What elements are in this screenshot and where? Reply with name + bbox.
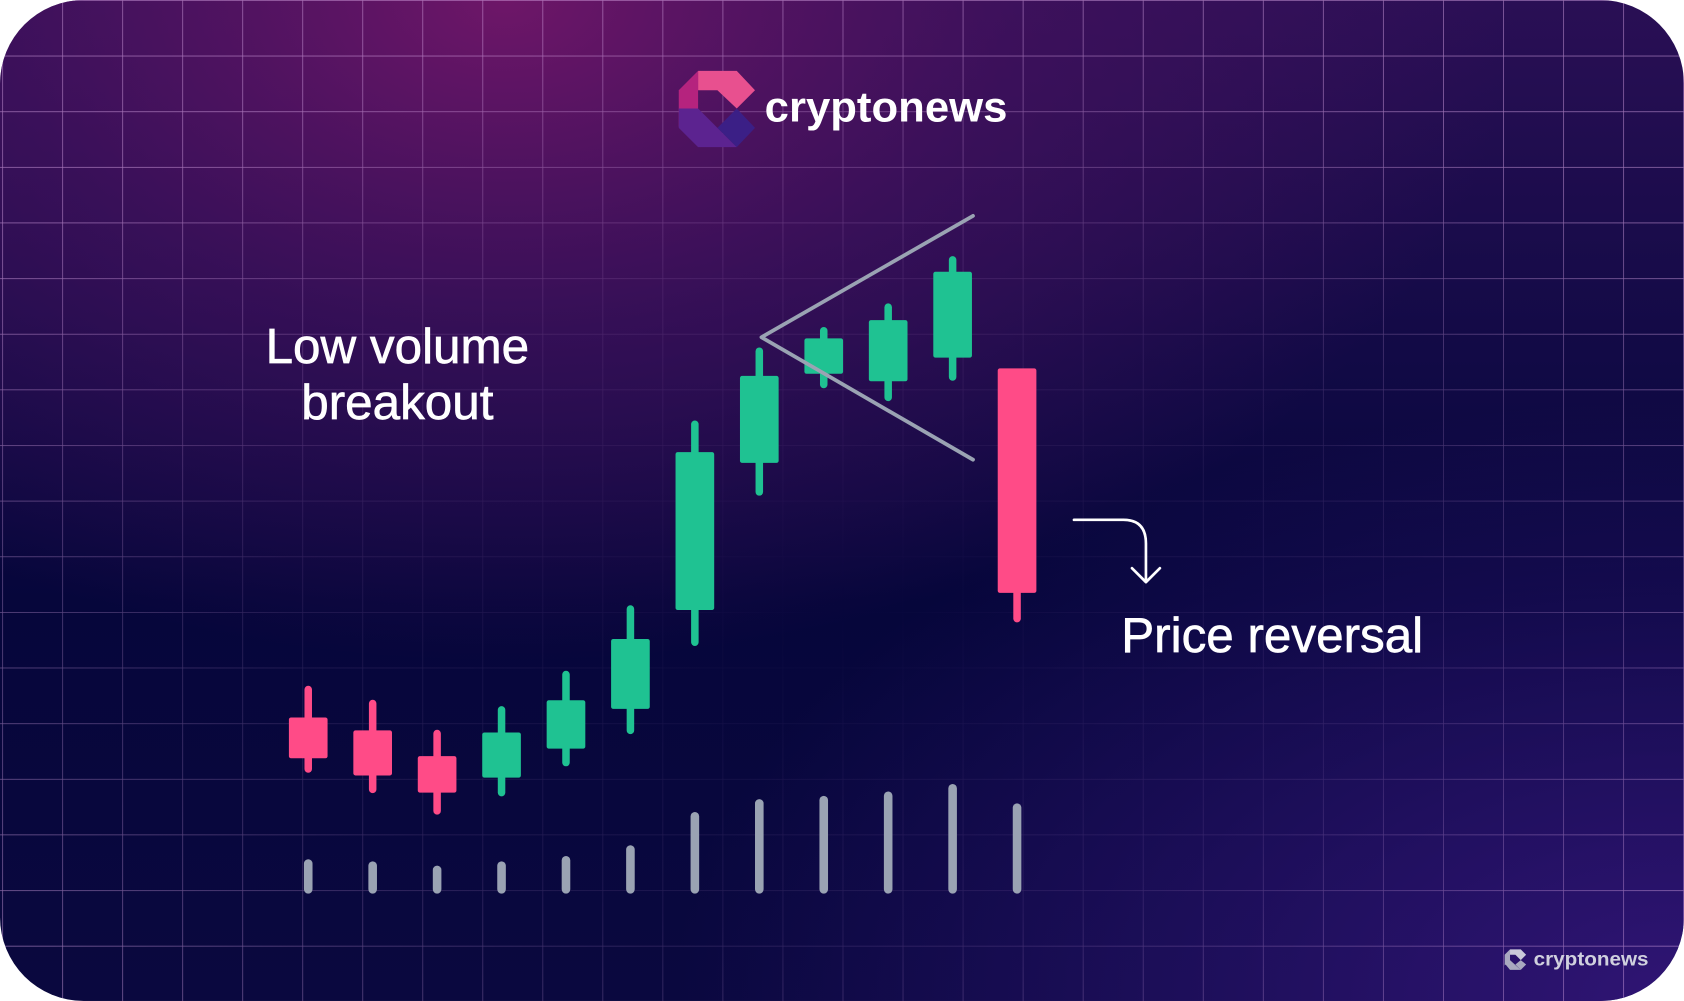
icon: cryptonews logo mark <box>679 71 755 147</box>
candle 1 <box>289 690 328 769</box>
watermark <box>1505 949 1649 971</box>
candle 10 <box>869 307 908 397</box>
candle 4 <box>482 710 521 793</box>
arrow: down-turn <box>1074 520 1160 582</box>
candle 2 <box>353 703 392 789</box>
candle 5 <box>547 674 585 763</box>
logo text: cryptonews <box>765 83 1007 131</box>
volume bars <box>308 788 1017 889</box>
pennant triangle <box>761 216 973 460</box>
candle 6 <box>611 609 650 730</box>
logo <box>679 71 1007 147</box>
candle 9 <box>804 331 843 385</box>
label: price reversal: Price reversal <box>1121 608 1423 663</box>
candle 8 <box>740 351 779 492</box>
watermark text: cryptonews <box>1534 950 1649 971</box>
label: low volume breakout: Low volume <box>266 319 529 374</box>
icon: small logo <box>1505 949 1526 970</box>
candle 3 <box>418 734 456 811</box>
label: low volume breakout: breakout <box>301 375 494 430</box>
candlestick chart <box>289 260 1036 811</box>
candle 12 <box>998 368 1036 619</box>
candle 7 <box>676 424 714 642</box>
candle 11 <box>933 260 972 377</box>
